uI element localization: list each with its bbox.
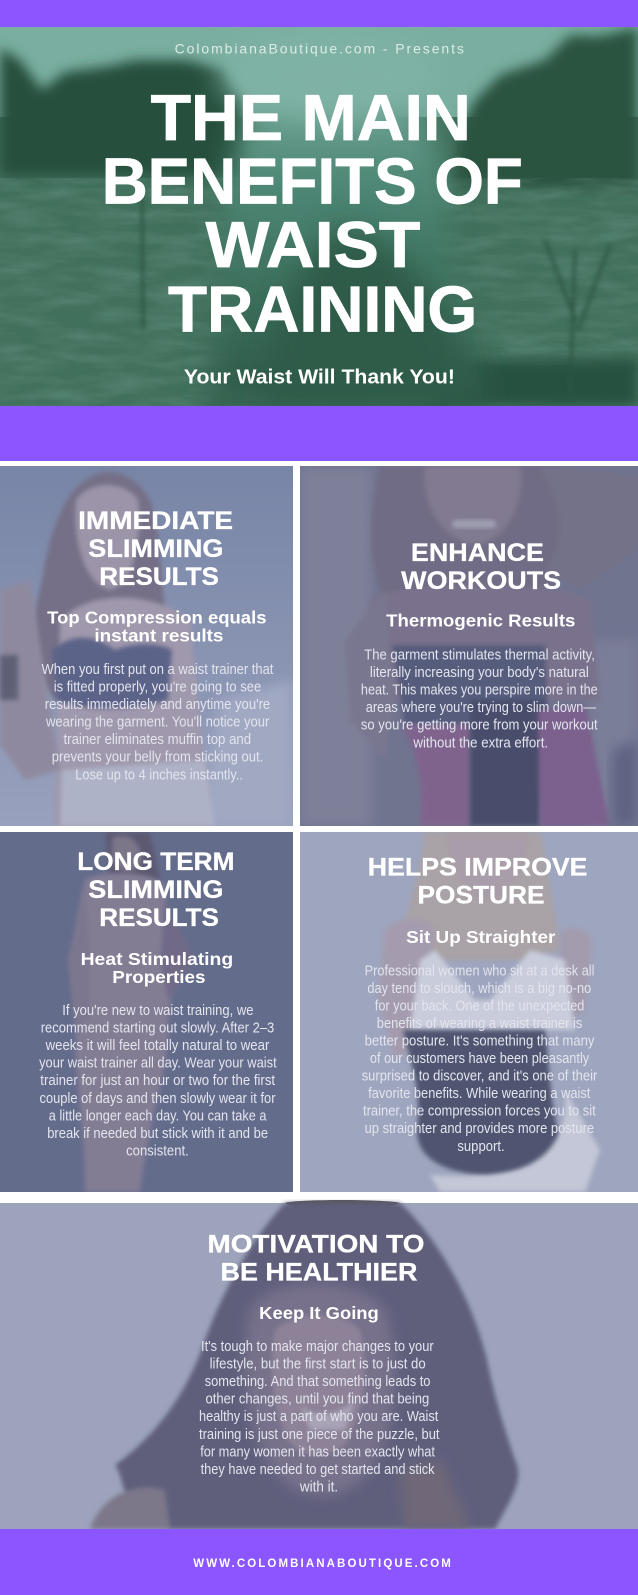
- body text: a little longer each day. You can take a: [49, 1108, 267, 1124]
- photo: woman with long dark hair: [0, 1200, 638, 1529]
- footer band: [0, 1529, 638, 1595]
- panel: motivation to be healthier: [0, 1200, 638, 1529]
- body text: they have needed to get started and stick: [201, 1462, 435, 1478]
- body text: If you're new to waist training, we: [62, 1003, 253, 1019]
- body text: with it.: [299, 1479, 338, 1495]
- body text: surprised to discover, and it's one of their: [362, 1069, 597, 1085]
- heading: POSTURE: [418, 882, 544, 910]
- body text: something. And that something leads to: [205, 1374, 430, 1390]
- main title: BENEFITS OF: [102, 144, 523, 217]
- body text: trainer for just an hour or two for the first: [40, 1073, 275, 1089]
- body text: up straighter and provides more posture: [365, 1121, 594, 1137]
- body text: lifestyle, but the first start is to just do: [210, 1357, 426, 1373]
- body text: couple of days and then slowly wear it for: [40, 1091, 276, 1107]
- heading: [401, 539, 561, 595]
- photo: woman in beige bodysuit: [0, 832, 293, 1192]
- body text: recommend starting out slowly. After 2–3: [41, 1021, 274, 1037]
- body text: for many women it has been exactly what: [200, 1444, 435, 1460]
- body text: support.: [457, 1139, 505, 1155]
- body text: of our customers have been pleasantly: [370, 1051, 590, 1067]
- hero panel: [0, 27, 638, 406]
- hero photo: girl in a field: [0, 27, 638, 406]
- body text: break if needed but stick with it and be: [47, 1126, 268, 1142]
- heading: RESULTS: [99, 563, 219, 591]
- heading: [77, 848, 234, 932]
- heading: SLIMMING: [88, 535, 223, 563]
- body text: other changes, until you find that being: [206, 1392, 429, 1408]
- hero tagline: Your Waist Will Thank You!: [184, 366, 455, 388]
- body text: trainer, the compression forces you to sit: [363, 1104, 596, 1120]
- main title: TRAINING: [168, 272, 477, 346]
- main title: WAIST: [206, 208, 420, 281]
- body text: literally increasing your body's natural: [370, 665, 589, 681]
- body text: training is just one piece of the puzzle, but: [199, 1427, 440, 1443]
- photo: woman in white dress: [0, 466, 293, 826]
- body text: your waist trainer all day. Wear your waist: [39, 1056, 277, 1072]
- body text: benefits of wearing a waist trainer is: [377, 1016, 582, 1032]
- body text: heat. This makes you perspire more in the: [361, 683, 598, 699]
- subheading: Properties: [112, 967, 206, 987]
- main title: THE MAIN: [151, 81, 471, 154]
- body text: It's tough to make major changes to your: [201, 1339, 434, 1355]
- subheading: Thermogenic Results: [386, 611, 576, 631]
- main title: [102, 81, 523, 346]
- subheading: Keep It Going: [259, 1303, 379, 1323]
- footer url: WWW.COLOMBIANABOUTIQUE.COM: [193, 1558, 451, 1570]
- panel: helps improve posture: [300, 832, 638, 1192]
- body text: so you're getting more from your workout: [361, 718, 598, 734]
- body text: The garment stimulates thermal activity,: [364, 648, 595, 664]
- body text: Professional women who sit at a desk all: [365, 963, 594, 979]
- body text: results immediately and anytime you're: [45, 697, 270, 713]
- heading: [78, 507, 233, 591]
- hero presenter line: ColombianaBoutique.com - Presents: [175, 40, 464, 56]
- subheading: [47, 607, 267, 646]
- subheading: Top Compression equals: [47, 607, 267, 627]
- top purple band: [0, 0, 638, 27]
- panel: long term slimming results: [0, 832, 293, 1192]
- body text: without the extra effort.: [412, 735, 548, 751]
- panel: immediate slimming results: [0, 466, 293, 826]
- heading: IMMEDIATE: [78, 507, 233, 535]
- heading: ENHANCE: [411, 539, 544, 567]
- photo: blonde woman in white top and waist trainer: [300, 832, 638, 1192]
- body text: [39, 1003, 277, 1159]
- body text: weeks it will feel totally natural to wear: [45, 1038, 270, 1054]
- heading: BE HEALTHIER: [220, 1258, 417, 1286]
- body text: [42, 662, 273, 783]
- purple band under hero: [0, 406, 638, 461]
- body text: for your back. One of the unexpected: [375, 998, 584, 1014]
- subheading: Sit Up Straighter: [406, 927, 556, 947]
- heading: RESULTS: [99, 904, 219, 932]
- body text: is fitted properly, you're going to see: [54, 680, 261, 696]
- body text: trainer eliminates muffin top and: [64, 732, 251, 748]
- subheading: Heat Stimulating: [81, 949, 233, 969]
- body text: favorite benefits. While wearing a waist: [368, 1086, 590, 1102]
- heading: SLIMMING: [88, 876, 223, 904]
- panel: enhance workouts: [300, 466, 638, 826]
- body text: day tend to slouch, which is a big no-no: [367, 981, 591, 997]
- heading: [368, 854, 588, 910]
- heading: HELPS IMPROVE: [368, 854, 588, 882]
- photo: woman with raised arm in corset: [300, 466, 638, 826]
- heading: LONG TERM: [77, 848, 234, 876]
- body text: healthy is just a part of who you are. Waist: [199, 1409, 438, 1425]
- heading: [208, 1230, 424, 1286]
- body text: [361, 648, 598, 751]
- body text: [199, 1339, 440, 1495]
- body text: consistent.: [126, 1143, 189, 1159]
- subheading: instant results: [94, 626, 224, 646]
- body text: [362, 963, 597, 1155]
- heading: MOTIVATION TO: [208, 1230, 424, 1258]
- body text: prevents your belly from sticking out.: [52, 750, 263, 766]
- heading: WORKOUTS: [401, 567, 561, 595]
- body text: wearing the garment. You'll notice your: [45, 715, 270, 731]
- subheading: [81, 949, 233, 987]
- body text: When you first put on a waist trainer that: [42, 662, 273, 678]
- body text: better posture. It's something that many: [365, 1034, 595, 1050]
- body text: Lose up to 4 inches instantly..: [75, 767, 243, 783]
- body text: areas where you're trying to slim down—: [366, 700, 597, 716]
